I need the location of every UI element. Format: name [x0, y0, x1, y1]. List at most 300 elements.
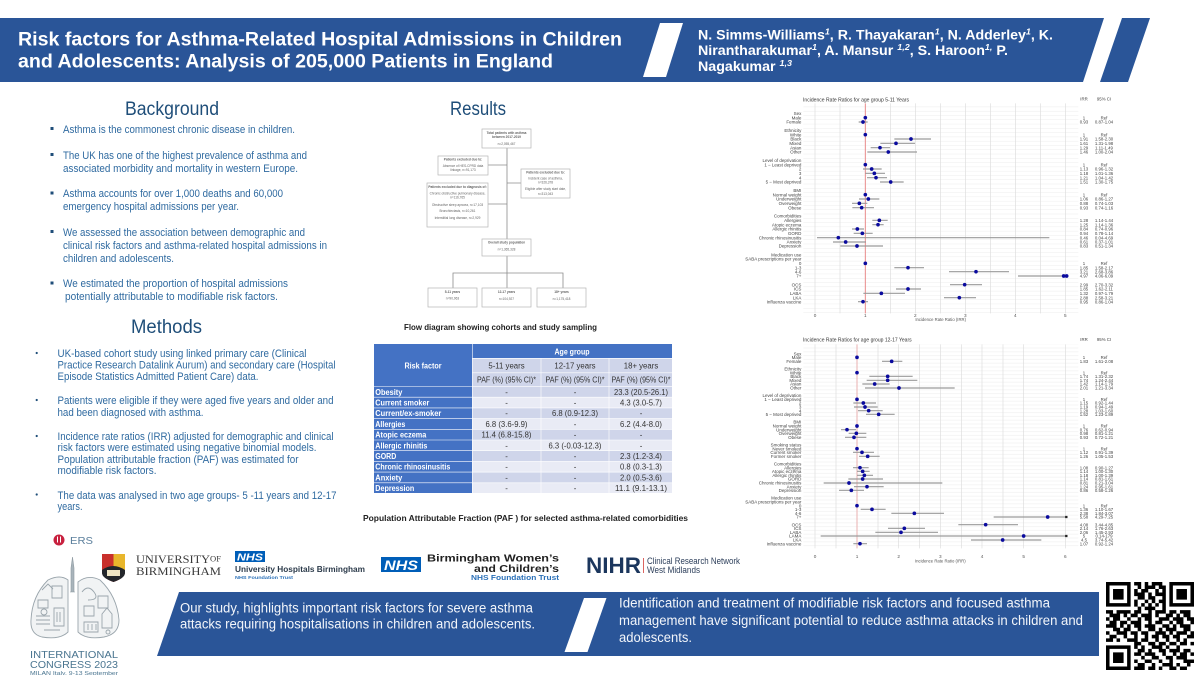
methods bullet text: Incidence rate ratios (IRR) adjusted for demographic and clinical — [58, 431, 334, 443]
row labels: Influenza vaccine — [767, 541, 802, 546]
IRR and confidence interval columns: 1 — [1083, 503, 1086, 508]
plot title: Incidence Rate Ratios for age group 12-17 Years — [803, 338, 912, 344]
row labels: Mixed — [789, 141, 802, 146]
background bullet text: children and adolescents. — [63, 253, 174, 265]
IRR and confidence interval columns: 1.13 — [1080, 167, 1089, 172]
axis ticks — [814, 554, 1067, 563]
icon: left lung — [31, 577, 68, 638]
axis ticks: 4 — [1014, 313, 1017, 318]
IRR and confidence interval columns: 1.85 — [1080, 287, 1089, 292]
authors: P. — [992, 43, 1008, 58]
row labels: SABA prescriptions per year — [745, 257, 802, 262]
row labels: 2 — [799, 167, 802, 172]
IRR and confidence interval columns: 1.74 — [1080, 374, 1089, 379]
row labels: 3 — [799, 405, 802, 410]
IRR and confidence interval columns: 0.51-1.34 — [1095, 244, 1114, 249]
flow diagram: Patients excluded due to: — [526, 170, 565, 174]
IRR and confidence interval columns: 1.58-2.30 — [1095, 137, 1114, 142]
IRR and confidence interval columns: 1.42 — [1080, 382, 1089, 387]
row labels: Allergies — [784, 465, 802, 470]
IRR and confidence interval columns: 0.78-1.14 — [1095, 231, 1114, 236]
IRR and confidence interval columns: 4.29-7.25 — [1095, 515, 1114, 520]
IRR and confidence interval columns: 95% CI — [1097, 97, 1111, 102]
conclusion text: right: management have significant potential to reduce asthma attacks in children and — [619, 613, 1083, 628]
IRR and confidence interval columns: 1.14-1.44 — [1095, 218, 1114, 223]
conclusion banner — [157, 592, 1099, 656]
IRR and confidence interval columns: 1.30-1.75 — [1095, 180, 1114, 185]
table: population attributable fraction: PAF (%) (95% CI)* — [477, 376, 536, 384]
row labels: Obese — [788, 205, 802, 210]
logo: NIHR Clinical Research Network: West Midlands — [647, 565, 700, 575]
IRR and confidence interval columns: 2.14 — [1080, 526, 1089, 531]
IRR and confidence interval columns: 1.25 — [1080, 222, 1089, 227]
IRR and confidence interval columns: Ref — [1101, 132, 1108, 137]
logo: University of Birmingham: BIRMINGHAM — [136, 566, 221, 578]
IRR and confidence interval columns: 1 — [1083, 192, 1086, 197]
IRR and confidence interval columns: 1.62-2.11 — [1095, 287, 1114, 292]
IRR and confidence interval columns: 1.07 — [1080, 541, 1089, 546]
row labels: Normal weight — [773, 192, 802, 197]
forest plot: age group 5-11 years — [745, 97, 1114, 322]
logo: international congress lungs — [30, 557, 119, 675]
logo: University of Birmingham — [102, 554, 222, 582]
row labels: Atopic eczema — [772, 469, 802, 474]
IRR and confidence interval columns: 1.04-1.42 — [1095, 175, 1114, 180]
IRR and confidence interval columns: 1.21-3.34 — [1095, 386, 1114, 391]
row labels: ICS — [794, 287, 801, 292]
IRR and confidence interval columns: Ref — [1101, 503, 1108, 508]
row labels: LABA — [790, 291, 801, 296]
table: population attributable fraction: - — [505, 398, 508, 408]
IRR and confidence interval columns: Ref — [1101, 370, 1108, 375]
flow diagram: Obstructive sleep apnoea, n=17,103 — [432, 203, 483, 207]
IRR and confidence interval columns: 0.81-1.21 — [1095, 431, 1114, 436]
table: population attributable fraction: - — [505, 452, 508, 461]
panel: background — [50, 99, 327, 303]
IRR and confidence interval columns: 1.31-1.98 — [1095, 141, 1114, 146]
row labels: Ethnicity — [784, 367, 802, 372]
logo: Birmingham Women's and Children's NHS: Birmingham Women’s — [427, 554, 560, 564]
row labels: White — [790, 132, 802, 137]
table: population attributable fraction: - — [574, 484, 577, 493]
authors: , A. Mansur — [817, 43, 897, 58]
axis ticks: 6 — [1064, 554, 1067, 559]
IRR and confidence interval columns: 1.01-1.36 — [1095, 171, 1114, 176]
row labels: Influenza vaccine — [767, 299, 802, 304]
IRR and confidence interval columns: 1.74 — [1080, 378, 1089, 383]
heading: results: Results — [450, 99, 506, 120]
axis ticks: 2 — [914, 313, 917, 318]
IRR and confidence interval columns: 0.74-0.96 — [1095, 227, 1114, 232]
row labels: Depression — [779, 488, 802, 493]
row labels — [745, 351, 802, 546]
congress text — [30, 649, 118, 675]
methods bullet text: Episode Statistics Admitted Patient Care) data. — [58, 371, 258, 383]
IRR and confidence interval columns: 1.21 — [1080, 175, 1089, 180]
IRR and confidence interval columns: 0.37-1.01 — [1095, 240, 1114, 245]
congress text: INTERNATIONAL — [30, 649, 118, 661]
axis ticks: Incidence Rate Ratio (IRR) — [915, 558, 966, 563]
row labels: OCS — [792, 522, 801, 527]
methods bullet text: Population attributable fraction (PAF) was estimated for — [58, 454, 299, 466]
IRR and confidence interval columns: 2.88 — [1080, 295, 1089, 300]
IRR and confidence interval columns: 0.86 — [1080, 488, 1089, 493]
IRR and confidence interval columns: 0.21-3.04 — [1095, 481, 1114, 486]
IRR and confidence interval columns: Ref — [1101, 162, 1108, 167]
table: population attributable fraction: Allergic rhinitis — [375, 441, 428, 450]
IRR and confidence interval columns: 0.98 — [1080, 431, 1089, 436]
row labels: Medication use — [771, 496, 802, 501]
conclusion text: left: attacks requiring hospitalisations in children and adolescents. — [180, 616, 535, 632]
flow diagram: Total patients with asthma — [487, 131, 527, 135]
IRR and confidence interval columns: 0.92-1.24 — [1095, 541, 1114, 546]
logo: Birmingham Women's and Children's NHS: and Children’s — [474, 564, 560, 575]
authors: 1, — [985, 42, 992, 52]
row labels: 5 − Most deprived — [766, 180, 802, 185]
IRR and confidence interval columns: 5 — [1083, 534, 1086, 539]
axis ticks: 3 — [939, 554, 942, 559]
IRR and confidence interval columns: 0.90-1.27 — [1095, 465, 1114, 470]
logo: ERS — [54, 534, 93, 547]
table: population attributable fraction: - — [574, 452, 577, 461]
row labels: BMI — [793, 420, 801, 425]
IRR and confidence interval columns: 1 — [1083, 115, 1086, 120]
row labels: Depression — [779, 244, 802, 249]
forest plot: age group 12-17 years — [745, 337, 1114, 563]
IRR and confidence interval columns: Ref — [1101, 261, 1108, 266]
IRR and confidence interval columns: 1.19 — [1080, 405, 1089, 410]
flow diagram: n=104,927 — [499, 297, 514, 301]
table: population attributable fraction: 6.2 (4.4-8.0) — [620, 420, 662, 429]
IRR and confidence interval columns: 1.24 — [1080, 484, 1089, 489]
IRR and confidence interval columns: 1.83 — [1080, 359, 1089, 364]
authors: 1 — [812, 42, 817, 52]
authors: Nagakumar — [698, 59, 772, 74]
IRR and confidence interval columns: 0.14-179 — [1095, 534, 1113, 539]
IRR and confidence interval columns: 1.45-2.93 — [1095, 530, 1114, 535]
flow diagram: Interstitial lung disease, n=2,929 — [435, 216, 481, 220]
logo: ERS: ERS — [70, 535, 93, 547]
row labels: 5 − Most deprived — [766, 412, 802, 417]
logo: University of Birmingham: OF — [210, 554, 222, 564]
row labels: Asian — [790, 382, 802, 387]
conclusion text: right — [619, 596, 1083, 645]
table: population attributable fraction: Anxiety — [375, 473, 403, 482]
flow diagram: Incident case of asthma, — [528, 176, 563, 180]
table: population attributable fraction: - — [505, 388, 508, 397]
row labels: Current smoker — [770, 450, 802, 455]
IRR and confidence interval columns: 3.44-4.85 — [1095, 522, 1114, 527]
IRR and confidence interval columns: 0.58-1.26 — [1095, 488, 1114, 493]
IRR and confidence interval columns: 0.95-1.61 — [1095, 484, 1114, 489]
IRR and confidence interval columns: 1.32 — [1080, 291, 1089, 296]
logo: NIHR Clinical Research Network: Clinical Research Network — [647, 556, 740, 566]
IRR and confidence interval columns: 0.86-1.04 — [1095, 299, 1114, 304]
title — [18, 30, 622, 72]
background bullet text: associated morbidity and mortality in western Europe. — [63, 163, 298, 175]
IRR and confidence interval columns: 0.93 — [1080, 205, 1089, 210]
background bullet text: We estimated the proportion of hospital admissions — [63, 278, 288, 290]
authors: 1,2 — [897, 42, 910, 52]
IRR and confidence interval columns: 0.95 — [1080, 299, 1089, 304]
IRR and confidence interval columns: 4.97 — [1080, 274, 1089, 279]
row labels: 4 — [799, 408, 802, 413]
row labels: Level of deprivation — [762, 158, 802, 163]
IRR and confidence interval columns: 1.61-2.08 — [1095, 359, 1114, 364]
authors: 1 — [1026, 26, 1031, 36]
IRR and confidence interval columns: 1.23-1.89 — [1095, 412, 1114, 417]
row labels: Underweight — [776, 427, 802, 432]
methods bullet text: The data was analysed in two age groups- 5 -11 years and 12-17 — [58, 490, 336, 502]
row labels — [745, 111, 802, 304]
IRR and confidence interval columns: 0.04-4.69 — [1095, 235, 1114, 240]
IRR and confidence interval columns: 1.14 — [1080, 469, 1089, 474]
IRR and confidence interval columns: 3.74-5.42 — [1095, 538, 1114, 543]
title: and Adolescents: Analysis of 205,000 Patients in England — [18, 52, 553, 72]
table: population attributable fraction: 6.8 (3.6-9.9) — [486, 420, 528, 429]
flow diagram: n=2,055,467 — [498, 142, 516, 146]
row labels: Normal weight — [773, 424, 802, 429]
IRR and confidence interval columns: 1.61 — [1080, 141, 1089, 146]
row labels: 4-6 — [795, 269, 802, 274]
IRR and confidence interval columns: 2.01 — [1080, 386, 1089, 391]
IRR and confidence interval columns: Ref — [1101, 115, 1108, 120]
IRR and confidence interval columns: 1.06 — [1080, 197, 1089, 202]
conclusion text: right: adolescents. — [619, 630, 692, 645]
IRR and confidence interval columns: 0.94 — [1080, 231, 1089, 236]
IRR and confidence interval columns: 1.08 — [1080, 465, 1089, 470]
flow diagram: n=90,963 — [446, 296, 459, 300]
icon: crest — [102, 554, 125, 582]
row labels: Allergic rhinitis — [772, 473, 802, 478]
IRR and confidence interval columns: 0.92-1.44 — [1095, 401, 1114, 406]
IRR and confidence interval columns: 1.24-2.44 — [1095, 378, 1114, 383]
IRR and confidence interval columns: 1.76-2.63 — [1095, 526, 1114, 531]
IRR and confidence interval columns: 4.08 — [1080, 522, 1089, 527]
table: population attributable fraction: - — [640, 409, 643, 418]
IRR and confidence interval columns: 1 — [1083, 132, 1086, 137]
row labels: ICS — [794, 526, 801, 531]
IRR and confidence interval columns: 2.99 — [1080, 282, 1089, 287]
axis ticks: 1 — [856, 554, 859, 559]
IRR and confidence interval columns: 1 — [1083, 162, 1086, 167]
IRR and confidence interval columns: 1.18 — [1080, 473, 1089, 478]
IRR and confidence interval columns: 1 — [1083, 397, 1086, 402]
authors: , S. Haroon — [910, 43, 985, 58]
flow diagram: Absence of HES-CPRD data — [443, 164, 484, 168]
IRR and confidence interval columns: 0.94-1.49 — [1095, 405, 1114, 410]
IRR and confidence interval columns: Ref — [1101, 355, 1108, 360]
flow diagram — [427, 129, 586, 307]
row labels: OCS — [792, 282, 801, 287]
table: population attributable fraction: - — [505, 441, 508, 450]
plot grid — [803, 103, 1078, 313]
authors: 1,3 — [780, 58, 792, 68]
IRR and confidence interval columns: 1.46 — [1080, 150, 1089, 155]
table: population attributable fraction: 2.0 (0.5-3.6) — [620, 473, 662, 482]
IRR and confidence interval columns: 1.12 — [1080, 450, 1089, 455]
IRR and confidence interval columns: 0.62-0.94 — [1095, 427, 1114, 432]
methods bullet text: modifiable risk factors. — [58, 465, 156, 477]
IRR and confidence interval columns: 1.31-2.32 — [1095, 374, 1114, 379]
IRR and confidence interval columns: 1 — [1083, 370, 1086, 375]
IRR and confidence interval columns: 0.93 — [1080, 435, 1089, 440]
flow diagram: n=1,175,418 — [553, 297, 571, 301]
IRR and confidence interval columns: 1.85 — [1080, 265, 1089, 270]
row labels: Overweight — [779, 431, 802, 436]
IRR and confidence interval columns: 1 — [1083, 424, 1086, 429]
row labels: Chronic rhinosinusitis — [759, 481, 802, 486]
row labels: SABA prescriptions per year — [745, 500, 802, 505]
table: population attributable fraction: - — [574, 463, 577, 472]
flow diagram: n=116,765 — [450, 196, 465, 200]
axis ticks: 0 — [814, 554, 817, 559]
row labels: 4 — [799, 175, 802, 180]
row labels: Male — [792, 115, 802, 120]
table: population attributable fraction: 23.3 (20.5-26.1) — [614, 388, 668, 397]
row labels: LKA — [793, 295, 801, 300]
methods bullet text: Patients were eligible if they were aged five years and older and — [58, 395, 334, 407]
row labels: LKA — [793, 538, 801, 543]
table: population attributable fraction: 6.3 (-0.03-12.3) — [548, 441, 602, 450]
background bullet text: The UK has one of the highest prevalence of asthma and — [63, 150, 307, 162]
table: population attributable fraction: 11.4 (6.8-15.8) — [482, 431, 532, 440]
table: population attributable fraction: Allergies — [375, 420, 406, 429]
flow diagram: Patients excluded due to: — [444, 158, 482, 162]
IRR and confidence interval columns: 1.00-2.04 — [1095, 150, 1114, 155]
logo: Birmingham Women's and Children's NHS: NHS — [384, 557, 419, 573]
row labels: 0 — [799, 261, 802, 266]
table: population attributable fraction: - — [574, 431, 577, 440]
table: population attributable fraction: 12-17 years — [554, 362, 596, 370]
IRR and confidence interval columns: 0.72-1.21 — [1095, 435, 1114, 440]
methods bullet text: risk factors were estimated using negative binomial models. — [58, 442, 316, 454]
row labels: 7+ — [796, 274, 802, 279]
IRR and confidence interval columns: 1.14-1.36 — [1095, 222, 1114, 227]
row labels: GORD — [788, 477, 802, 482]
IRR and confidence interval columns: 1.00-1.30 — [1095, 469, 1114, 474]
flow diagram: linkage, n=91,173 — [450, 168, 476, 172]
authors: 1 — [935, 26, 940, 36]
methods bullet text: years. — [58, 501, 82, 513]
row labels: Asian — [790, 145, 802, 150]
flow diagram: Eligible after study start date, — [525, 187, 566, 191]
logo: NIHR Clinical Research Network — [586, 553, 740, 578]
IRR and confidence interval columns: 1.05-1.53 — [1095, 454, 1114, 459]
table: population attributable fraction: - — [640, 441, 643, 450]
table: population attributable fraction: Current/ex-smoker — [375, 409, 441, 418]
axis ticks: 2 — [897, 554, 900, 559]
table: population attributable fraction: - — [505, 473, 508, 482]
row labels: 4-6 — [795, 511, 802, 516]
table: population attributable fraction: - — [640, 431, 643, 440]
IRR and confidence interval columns: 1.52 — [1080, 412, 1089, 417]
table: population attributable fraction: - — [574, 473, 577, 482]
icon: tower — [70, 557, 75, 592]
row labels: 1 − Least deprived — [764, 162, 802, 167]
row labels: Allergies — [784, 218, 802, 223]
table: population attributable fraction: Obesity — [375, 388, 403, 397]
IRR and confidence interval columns: Ref — [1101, 446, 1108, 451]
row labels: 0 — [799, 503, 802, 508]
IRR and confidence interval columns: 0.74-1.16 — [1095, 205, 1114, 210]
point estimates — [838, 118, 1067, 302]
table: population attributable fraction: 0.8 (0.3-1.3) — [620, 463, 662, 472]
flow diagram: 18+ years — [554, 290, 569, 294]
IRR and confidence interval columns — [1080, 337, 1114, 546]
table: population attributable fraction: 4.3 (3.0-5.7) — [620, 398, 662, 408]
flow diagram: between 2017-2019 — [492, 135, 521, 139]
IRR and confidence interval columns: 0.61 — [1080, 240, 1089, 245]
authors: , R. Thayakaran — [830, 28, 935, 42]
row labels: Smoking status — [771, 443, 802, 448]
table: population attributable fraction: 5-11 years — [488, 362, 525, 370]
background bullet text: emergency hospital admissions per year. — [63, 201, 239, 213]
flow diagram: Patients excluded due to diagnosis of: — [428, 185, 487, 189]
IRR and confidence interval columns: 2.06 — [1080, 530, 1089, 535]
table: population attributable fraction: 6.8 (0.9-12.3) — [552, 409, 598, 418]
IRR and confidence interval columns: Ref — [1101, 424, 1108, 429]
IRR and confidence interval columns: 1.28 — [1080, 408, 1089, 413]
logo: University Hospitals Birmingham NHS: NHS — [237, 552, 263, 564]
methods bullet text: UK-based cohort study using linked primary care (Clinical — [58, 348, 306, 360]
row labels: BMI — [793, 188, 801, 193]
row labels: GORD — [788, 231, 802, 236]
IRR and confidence interval columns: 0.84 — [1080, 227, 1089, 232]
row labels: LABA — [790, 530, 801, 535]
flow diagram: n=313,043 — [538, 192, 553, 196]
background bullet text: potentially attributable to modifiable risk factors. — [65, 291, 278, 303]
IRR and confidence interval columns: 95% CI — [1097, 337, 1111, 342]
authors: 1 — [825, 26, 830, 36]
IRR and confidence interval columns: 1.15 — [1080, 401, 1089, 406]
IRR and confidence interval columns: 0.87-1.04 — [1095, 120, 1114, 125]
axis ticks: 5 — [1022, 554, 1025, 559]
authors: N. Simms-Williams — [698, 28, 819, 42]
row labels: Black — [790, 137, 802, 142]
IRR and confidence interval columns: 0.74-1.03 — [1095, 201, 1114, 206]
row labels: Other — [790, 386, 802, 391]
IRR and confidence interval columns: 0.91-1.39 — [1095, 450, 1114, 455]
IRR and confidence interval columns: IRR — [1080, 97, 1088, 102]
row labels: 1 − Least deprived — [764, 397, 802, 402]
IRR and confidence interval columns: 1.28 — [1080, 218, 1089, 223]
table: population attributable fraction: - — [505, 484, 508, 493]
IRR and confidence interval columns: 0.46 — [1080, 235, 1089, 240]
IRR and confidence interval columns: 5.58 — [1080, 515, 1089, 520]
IRR and confidence interval columns: 0.76 — [1080, 427, 1089, 432]
row labels: Other — [790, 150, 802, 155]
IRR and confidence interval columns: 0.97-1.79 — [1095, 291, 1114, 296]
row labels: Anxiety — [787, 240, 802, 245]
QR code — [1106, 582, 1194, 670]
point estimates — [847, 357, 1048, 544]
table: population attributable fraction: - — [505, 409, 508, 418]
row labels: Obese — [788, 435, 802, 440]
table: population attributable fraction: - — [574, 388, 577, 397]
IRR and confidence interval columns: Ref — [1101, 192, 1108, 197]
IRR and confidence interval columns: 0.81-1.61 — [1095, 477, 1114, 482]
logo: University of Birmingham: UNIVERSITY — [136, 554, 205, 566]
IRR and confidence interval columns: 1.29 — [1080, 145, 1089, 150]
IRR and confidence interval columns: 0.96-1.32 — [1095, 167, 1114, 172]
IRR and confidence interval columns: 2.58-3.21 — [1095, 295, 1114, 300]
table: population attributable fraction: 18+ years — [624, 362, 658, 370]
row labels: Allergic rhinitis — [772, 227, 802, 232]
IRR and confidence interval columns: IRR — [1080, 337, 1088, 342]
row labels: 7+ — [796, 515, 802, 520]
row labels: Anxiety — [787, 484, 802, 489]
